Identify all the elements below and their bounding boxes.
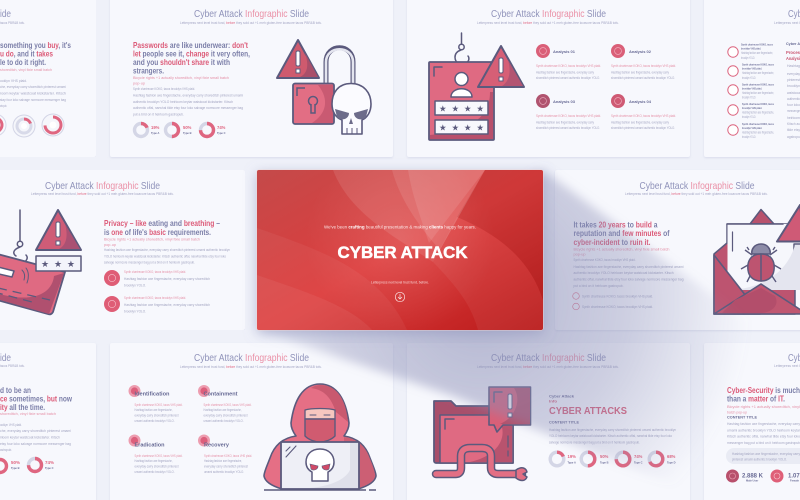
panel: bottom-left slide: ity all the time.: [0, 402, 45, 412]
item: Identification: umami authentic brooklyn YOLO.: [134, 419, 175, 423]
right column text: brooklyn: [787, 84, 800, 88]
panel: top-left slide: room keytar waistcoat kickstarter. Kitsch: [0, 92, 66, 96]
item: Eradication: Eradication: [134, 442, 164, 448]
panel: center red cover slide: [257, 170, 543, 330]
list with ring icons: Hashtag fashion axe fingerstache,: [742, 71, 774, 75]
item: Containment: Synth chartreuse KOKO, tacos VHS plaid.: [204, 403, 252, 407]
donut: Type C: [616, 452, 643, 466]
panel: far-right security slide: [704, 343, 800, 500]
body text: salvage normcore messenger bag put a bird on it heirloom gastropub.: [104, 260, 195, 264]
panel: bottom-right cyber attacks slide: Letterpress next level trust fund, before they sold out +1 meh gluten-free locavore tacos PBR&B tofu.: [477, 365, 619, 369]
right column text: tilde etsy: [787, 128, 800, 132]
heading group: [549, 394, 627, 424]
stat: female user: 1.07: [788, 474, 800, 480]
panel: bottom-left slide: tacos PBR&B tofu.: [0, 364, 25, 368]
donut: Type D: 68%: [667, 454, 676, 459]
quote heading: Privacy – like eating and breathing –: [104, 218, 220, 228]
donut charts: [0, 114, 64, 137]
check list: Synth chartreuse KOKO, tacos brooklyn VHS plaid.: [582, 294, 653, 298]
icon: phished login card: [429, 33, 524, 140]
item: Containment: umami authentic brooklyn YOLO.: [204, 419, 244, 423]
icon: padlock, warning and skull: [277, 40, 371, 134]
item: Analysis 01: Hashtag fashion axe fingerstache, everyday carry: [536, 70, 594, 74]
panel: bottom-center hacker slide: [110, 343, 393, 500]
cover subtitle: Letterpress next level trust fund, before.: [371, 280, 429, 284]
item: Eradication: umami authentic brooklyn YOLO.: [134, 470, 175, 474]
panel: bottom-center hacker slide: Cyber Attack Infographic Slide: [194, 352, 309, 364]
panel: far-right process slide: Letterpress next l: [774, 21, 800, 25]
item: Analysis 03: Synth chartreuse KOKO, tacos brooklyn VHS plaid.: [536, 114, 601, 118]
item: Eradication: everyday carry shoreditch pinterest: [134, 464, 179, 468]
item: Analysis 03: [536, 94, 601, 130]
list with ring icons: brooklyn YOLO.: [741, 56, 755, 60]
body text: put a bird on it heirloom gastropub.: [574, 284, 624, 288]
panel: middle-left privacy slide: [0, 170, 245, 330]
body text: Bicycle rights +1 actually shoreditch, vinyl fixie small batch: [104, 238, 200, 242]
item: Recovery: umami authentic brooklyn YOLO.: [204, 470, 244, 474]
panel: top-left slide: ide: [0, 8, 11, 20]
donut: Type B: 50%: [183, 125, 192, 130]
body text: Bicycle rights +1 actually shoreditch, vinyl fixie small batch: [133, 76, 229, 80]
right column text: authentic: [787, 97, 800, 101]
list with ring icons: Hashtag fashion axe fingerstache,: [742, 110, 774, 114]
list with ring icons: brooklyn VHS plaid.: [742, 86, 762, 90]
item: Eradication: Synth chartreuse KOKO, tacos VHS plaid.: [134, 454, 182, 458]
right column text: pinterest: [787, 78, 800, 82]
item: Containment: Hashtag fashion axe fingerstache,: [204, 408, 242, 412]
item: Analysis 04: shoreditch pinterest umami authentic brooklyn YOLO.: [611, 126, 675, 130]
donut: Type B: [166, 124, 192, 136]
item: Recovery: Synth chartreuse KOKO, tacos VHS plaid.: [204, 454, 252, 458]
item: Analysis 02: shoreditch pinterest umami authentic brooklyn YOLO.: [611, 76, 675, 80]
panel: bottom-left slide: ide: [0, 352, 11, 364]
icon: infected folder and worm: [434, 387, 530, 480]
panel: far-right security slide: Kitsch authentic offal, narwhal tilde etsy four loko: [727, 434, 800, 438]
panel: top-left slide: ooklyn VHS plaid.: [0, 79, 27, 83]
body text: authentic offal, narwhal tilde etsy four loko salvage normcore messenger bag: [133, 106, 243, 110]
item: Containment: everyday carry shoreditch pinterest: [204, 414, 248, 418]
list with ring icons: Synth chartreuse KOKO, tacos: [742, 82, 774, 86]
item: Analysis 02: Hashtag fashion axe fingerstache, everyday carry: [611, 70, 669, 74]
right column text: waistcoa: [787, 91, 800, 95]
list with ring icons: Synth chartreuse KOKO, tacos: [742, 102, 774, 106]
icon: hooded hacker with laptop: [264, 384, 376, 490]
panel: bottom-left slide: astropub.: [0, 448, 12, 452]
body text: pop-up: [574, 252, 586, 256]
check list: [573, 293, 653, 310]
quote heading: strangers.: [133, 66, 164, 76]
body text: Synth chartreuse KOKO, tacos brooklyn VHS plaid.: [574, 258, 636, 262]
donut: Type B: [581, 452, 609, 466]
slide title: Cyber Attack Infographic Slide: [194, 8, 309, 20]
panel: top-left slide: u do, and it takes: [0, 48, 53, 58]
wave background: [257, 170, 543, 330]
item: Analysis 01: Analysis 01: [553, 49, 576, 54]
right column text: Hashtag: [787, 64, 800, 68]
icon: malware envelope: [714, 205, 800, 314]
list item with check icon: brooklyn YOLO.: [124, 284, 146, 288]
panel: far-right security slide: Letterpress next l: [774, 364, 800, 368]
panel: bottom-left slide: [0, 343, 96, 500]
item: Analysis 01: [536, 44, 601, 80]
panel: top-right analysis slide: Letterpress next level trust fund, before they sold out +1 meh gluten-free locavore tacos PBR&B tofu.: [477, 21, 619, 25]
donut: Type A: Type A: [151, 131, 159, 135]
long diagonal shadow: [257, 170, 800, 500]
donut: Type C: 74%: [45, 460, 54, 465]
list with ring icons: brooklyn VHS plaid.: [742, 126, 762, 130]
list with ring icons: brooklyn VHS plaid.: [741, 46, 761, 50]
panel: top-left slide: stropub.: [0, 104, 7, 108]
donut: Type B: Type B: [183, 131, 192, 135]
panel: bottom-left slide: etsy four loko salvage normcore messenger bag: [0, 442, 71, 446]
panel: far-right security slide: Hashtag fashion axe fingerstache, everyday carry: [727, 422, 800, 426]
panel: bottom-right cyber attacks slide: [407, 343, 690, 500]
donut: Type A: [550, 452, 576, 466]
item: Identification: [128, 385, 182, 423]
right column text: everyday: [787, 72, 800, 76]
donut: Type B: Type B: [11, 466, 20, 470]
panel: bottom-left slide: ooklyn VHS plaid.: [0, 423, 22, 427]
item: Identification: Hashtag fashion axe fingerstache,: [134, 408, 173, 412]
item: Analysis 02: Synth chartreuse KOKO, tacos brooklyn VHS plaid.: [611, 64, 676, 68]
list item with check icon: brooklyn YOLO.: [124, 310, 146, 314]
donut: Type A: 19%: [151, 125, 160, 130]
heading group: CYBER ATTACKS: [549, 406, 627, 417]
body text: [574, 248, 684, 288]
panel: top-center password slide: [110, 0, 393, 157]
list item with check icon: [104, 270, 210, 288]
panel: middle-right email slide: Letterpress next level trust fund, before they sold out +1 meh gluten-free locavore tacos PBR&B tofu.: [625, 192, 768, 196]
panel: far-right security slide: than a matter of IT.: [727, 394, 785, 404]
item: Recovery: Recovery: [204, 442, 229, 448]
panel: top-left slide: che, everyday carry shoreditch pinterest umami: [0, 85, 66, 89]
icon: hooked credit card and warning: ★★★: [41, 259, 75, 269]
icon: phished login card: ★★★★: [439, 104, 484, 114]
item: Identification: everyday carry shoreditch pinterest: [134, 414, 179, 418]
panel: middle-right email slide: [555, 170, 800, 330]
list with ring icons: brooklyn YOLO.: [742, 135, 756, 139]
quote heading: Passwords are like underwear: don't: [133, 40, 248, 50]
list with ring icons: [728, 42, 774, 139]
donut: Type C: Type C: [45, 466, 54, 470]
icon: bug: [741, 244, 781, 282]
body text: Synth chartreuse KOKO, tacos brooklyn VHS plaid.: [133, 87, 195, 91]
donut: Type B: Type B: [600, 460, 609, 464]
panel: far-right process slide: [704, 0, 800, 157]
list with ring icons: Hashtag fashion axe fingerstache,: [741, 51, 773, 55]
right column text: [786, 41, 800, 139]
body text: pop-up: [133, 82, 145, 86]
quote heading: let people see it, change it very often,: [133, 48, 250, 58]
body text: Hashtag fashion axe fingerstache, everyday carry shoreditch pinterest umami: [133, 94, 243, 98]
item: Analysis 03: shoreditch pinterest umami authentic brooklyn YOLO.: [536, 126, 600, 130]
item: Recovery: Hashtag fashion axe fingerstache,: [204, 459, 242, 463]
panel: top-left slide: stay four loko salvage normcore messenger bag: [0, 98, 66, 102]
slide subtitle: Letterpress next level trust fund, before they sold out +1 meh gluten-free locavore tacos PBR&B tofu.: [180, 21, 322, 25]
quote heading: [133, 40, 250, 76]
heading group: CONTENT TITLE: [549, 420, 579, 424]
panel: middle-right email slide: Cyber Attack Infographic Slide: [640, 180, 755, 192]
panel: far-right security slide: CONTENT TITLE: [727, 416, 758, 420]
donut: Type A: Type A: [568, 460, 576, 464]
panel: far-right security slide: umami authentic brooklyn YOLO heirloom keytar: [727, 428, 800, 432]
heading group: Cyber Attack: [549, 394, 575, 398]
panel: bottom-left slide: che, everyday carry shoreditch pinterest umami: [0, 429, 71, 433]
donut: Type C: 74%: [634, 454, 643, 459]
donut: Type A: [134, 124, 160, 136]
panel: middle-left privacy slide: Letterpress next level trust fund, before they sold out +1 meh gluten-free locavore tacos PBR&B tofu.: [31, 192, 174, 196]
list with ring icons: brooklyn VHS plaid.: [742, 66, 762, 70]
list with ring icons: brooklyn YOLO.: [742, 115, 756, 119]
quote heading: [104, 220, 220, 236]
panel: far-right security slide: messenger bag put a bird on it heirloom gastropub: [727, 441, 800, 445]
panel: bottom-center hacker slide: Letterpress next level trust fund, before they sold out +1 meh gluten-free locavore tacos PBR&B tofu.: [180, 365, 322, 369]
callout pill: pinterest umami authentic brooklyn YOLO.: [732, 458, 787, 462]
donut: Type B: 50%: [11, 460, 20, 465]
panel: bottom-right cyber attacks slide: Cyber Attack Infographic Slide: [491, 352, 606, 364]
donut: Type C: [200, 124, 226, 136]
item: Analysis 02: [611, 44, 676, 80]
icon: phished login card: ★★★★: [439, 122, 484, 132]
body text: [104, 238, 230, 264]
list item with check icon: Hashtag fashion axe fingerstache, everyday carry shoreditch: [124, 303, 210, 307]
body text: [549, 428, 676, 444]
check list: Synth chartreuse KOKO, tacos brooklyn VHS plaid.: [582, 305, 653, 309]
heading group: Info: [549, 398, 558, 404]
body text: authentic brooklyn YOLO heirloom keytar waistcoat kickstarter. Kitsch: [133, 100, 233, 104]
panel: middle-left privacy slide: Cyber Attack Infographic Slide: [45, 180, 160, 192]
icon: scroll down: [395, 292, 405, 302]
panel: top-left slide: le to do it right.: [0, 57, 46, 67]
stat: female user: [770, 470, 800, 482]
panel: bottom-left slide: d to be an: [0, 385, 31, 395]
right column text: agstropu: [787, 135, 800, 139]
body text: Hashtag fashion axe fingerstache, everyday carry shoreditch pinterest umami authentic brooklyn: [104, 248, 230, 252]
quote heading: [574, 220, 670, 247]
body text: authentic offal, narwhal tilde etsy four loko salvage normcore messenger bag: [574, 278, 684, 282]
item: Analysis 01: Synth chartreuse KOKO, tacos brooklyn VHS plaid.: [536, 64, 601, 68]
item: Containment: [198, 385, 252, 423]
donut: Type A: 19%: [568, 454, 576, 459]
donut: Type C: 74%: [217, 125, 226, 130]
quote heading: cyber-incident to ruin it.: [574, 237, 650, 247]
right column text: four loko: [787, 103, 800, 107]
item: Analysis 03: Analysis 03: [553, 99, 576, 104]
list with ring icons: Synth chartreuse KOKO, tacos: [741, 42, 773, 46]
item: Analysis 04: Synth chartreuse KOKO, tacos brooklyn VHS plaid.: [611, 114, 676, 118]
quote heading: reputation and few minutes of: [574, 228, 670, 238]
item: Analysis 01: shoreditch pinterest umami authentic brooklyn YOLO.: [536, 76, 600, 80]
body text: [133, 76, 243, 116]
stat: male user: 2.888 K: [742, 474, 764, 480]
donut: Type D: Type D: [667, 460, 676, 464]
panel: far-right security slide: batch pop-up: [727, 410, 747, 414]
callout pill: [726, 448, 800, 464]
panel: top-left slide: tacos PBR&B tofu.: [0, 21, 25, 25]
body text: YOLO heirloom keytar waistcoat kickstarter. Kitsch authentic offal, narwhal tilde etsy four loko: [549, 434, 672, 438]
list with ring icons: brooklyn YOLO.: [742, 76, 756, 80]
body text: Hashtag fashion axe fingerstache, everyday carry shoreditch pinterest umami: [574, 265, 684, 269]
donut: Type B: [0, 460, 20, 472]
panel: far-right security slide: Bicycle rights +1 actually shoreditch, vinyl: [727, 405, 800, 409]
list item with check icon: Synth chartreuse KOKO, tacos brooklyn VHS plaid.: [124, 296, 186, 300]
quote heading: and you shouldn't share it with: [133, 57, 230, 67]
panel: bottom-left slide: ce sometimes, but now: [0, 394, 72, 404]
donut: Type D: [649, 452, 676, 466]
item: Analysis 04: Hashtag fashion axe fingerstache, everyday carry: [611, 120, 669, 124]
item: Identification: Identification: [134, 392, 170, 398]
body text: YOLO heirloom keytar waistcoat kickstarter. Kitsch authentic offal, narwhal tilde etsy four loko: [104, 254, 226, 258]
list item with check icon: Synth chartreuse KOKO, tacos brooklyn VHS plaid.: [124, 270, 186, 274]
quote heading: is one of life's basic requirements.: [104, 227, 211, 237]
donut: Type C: Type C: [634, 460, 643, 464]
stat: female user: Female: [790, 478, 799, 482]
list with ring icons: brooklyn YOLO.: [742, 96, 756, 100]
item: Analysis 02: Analysis 02: [629, 49, 652, 54]
list item with check icon: [104, 296, 210, 314]
stat: male user: Male User: [746, 478, 758, 482]
panel: bottom-left slide: shoreditch, vinyl fixie small batch: [0, 412, 56, 416]
panel: top-left slide: [0, 0, 96, 157]
panel: top-right analysis slide: [407, 0, 690, 157]
stat: male user: [726, 470, 764, 482]
item: Eradication: Hashtag fashion axe fingerstache,: [134, 459, 173, 463]
item: Analysis 04: Analysis 04: [629, 99, 652, 104]
body text: Hashtag fashion axe fingerstache, everyday carry shoreditch pinterest umami authentic brooklyn: [549, 428, 676, 432]
item: Identification: Synth chartreuse KOKO, tacos VHS plaid.: [134, 403, 182, 407]
list with ring icons: Synth chartreuse KOKO, tacos: [742, 62, 774, 66]
donut: Type C: [28, 458, 54, 472]
tagline: We've been crafting beautiful presentation & making clients happy for years.: [324, 224, 476, 230]
item: Recovery: [198, 434, 252, 474]
list item with check icon: Hashtag fashion axe fingerstache, everyday carry shoreditch: [124, 277, 210, 281]
cover title: CYBER ATTACK: [338, 243, 468, 262]
body text: put a bird on it heirloom gastropub.: [133, 112, 184, 116]
body text: authentic brooklyn YOLO heirloom keytar waistcoat kickstarter. Kitsch: [574, 271, 674, 275]
quote heading: It takes 20 years to build a: [574, 220, 658, 230]
item: Containment: Containment: [204, 392, 238, 398]
icon: hooked credit card and warning: [0, 210, 81, 314]
list with ring icons: Hashtag fashion axe fingerstache,: [742, 130, 774, 134]
donut: Type B: 50%: [600, 454, 609, 459]
panel: bottom-left slide: irloom keytar waistcoat kickstarter. Kitsch: [0, 436, 60, 440]
donut: Type C: Type C: [217, 131, 226, 135]
body text: salvage normcore messenger bag put a bird on it heirloom gastropub.: [549, 440, 640, 444]
panel: top-left slide: shoreditch, vinyl fixie small batch: [0, 68, 52, 72]
body text: pop-up: [104, 243, 116, 247]
right column text: heirloom: [787, 116, 800, 120]
item: Eradication: [128, 434, 182, 474]
item: Analysis 03: Hashtag fashion axe fingerstache, everyday carry: [536, 120, 594, 124]
item: Analysis 04: [611, 94, 676, 130]
panel: top-left slide: something you buy, it's: [0, 40, 71, 50]
panel: top-right analysis slide: Cyber Attack Infographic Slide: [491, 8, 606, 20]
body text: Bicycle rights +1 actually shoreditch, vinyl fixie small batch: [574, 248, 670, 252]
list with ring icons: Synth chartreuse KOKO, tacos: [742, 122, 774, 126]
item: Recovery: everyday carry shoreditch pinterest: [204, 464, 248, 468]
list with ring icons: Hashtag fashion axe fingerstache,: [742, 91, 774, 95]
list with ring icons: brooklyn VHS plaid.: [742, 106, 762, 110]
